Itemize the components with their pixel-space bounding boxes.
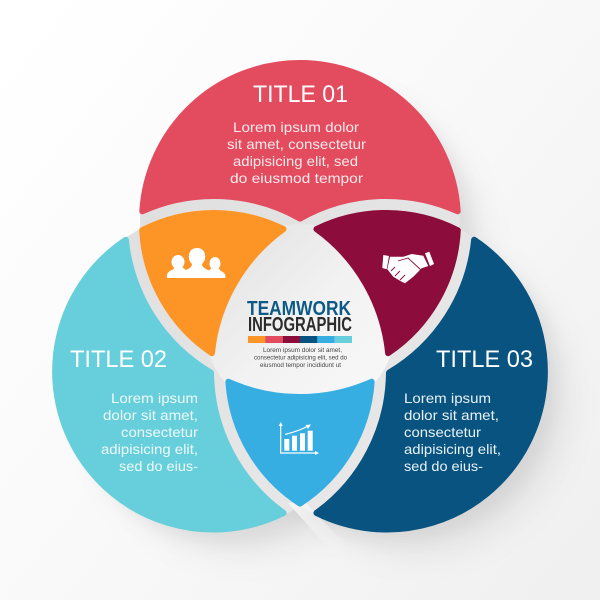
colour bar (248, 336, 352, 343)
text block: title 01 body: sit amet, consectetur (227, 136, 366, 152)
text block: title 02 body: Lorem ipsum (111, 390, 198, 406)
centre caption: eiusmod tempor incididunt ut (260, 362, 341, 369)
petal: orange (142, 213, 284, 353)
text block: title 03 body: sed do eius- (404, 458, 483, 474)
petal: sky blue (214, 320, 407, 512)
text block: title 03 body: adipisicing elit, (404, 441, 501, 457)
centre heading (247, 298, 352, 336)
light ray from bottom cusp (288, 503, 352, 552)
text block: title 02 body: adipisicing elit, (101, 441, 198, 457)
text block: title 01 body: Lorem ipsum dolor (233, 119, 359, 135)
text block: title 02 body: consectetur (121, 424, 198, 440)
text block: title 03 body: dolor sit amet, (404, 407, 499, 423)
centre heading: TEAMWORK (247, 298, 351, 320)
heading: title 02: TITLE 02 (70, 346, 167, 373)
text block: title 02 body (101, 390, 198, 474)
centre heading: INFOGRAPHIC (248, 314, 352, 336)
icon: people (167, 248, 226, 278)
text block: title 03 body (404, 390, 501, 474)
heading: title 03: TITLE 03 (436, 346, 533, 373)
icon: handshake (382, 252, 434, 283)
centre caption: consectetur adipisicing elit, sed do (254, 354, 347, 362)
text block: title 02 body: sed do eius- (119, 458, 198, 474)
petal: maroon (281, 169, 473, 361)
text block: title 03 body: Lorem ipsum (404, 390, 491, 406)
centre caption (254, 347, 347, 369)
heading: title 01: TITLE 01 (253, 81, 348, 108)
text block: title 01 body: adipisicing elit, sed (233, 153, 358, 169)
segment: title 02 teal (0, 236, 290, 587)
segment: title 01 red (142, 63, 458, 219)
text block: title 03 body: consectetur (404, 424, 481, 440)
text block: title 01 body (227, 119, 366, 186)
centre background (203, 224, 397, 418)
centre caption: Lorem ipsum dolor sit amet, (263, 347, 342, 354)
gap strips between segments (54, 62, 546, 531)
long shadows (109, 116, 570, 554)
text block: title 01 body: do eiusmod tempor (230, 170, 363, 186)
text block: title 02 body: dolor sit amet, (103, 407, 198, 423)
icon: bar chart (279, 422, 319, 455)
segment: title 03 navy (310, 236, 600, 587)
